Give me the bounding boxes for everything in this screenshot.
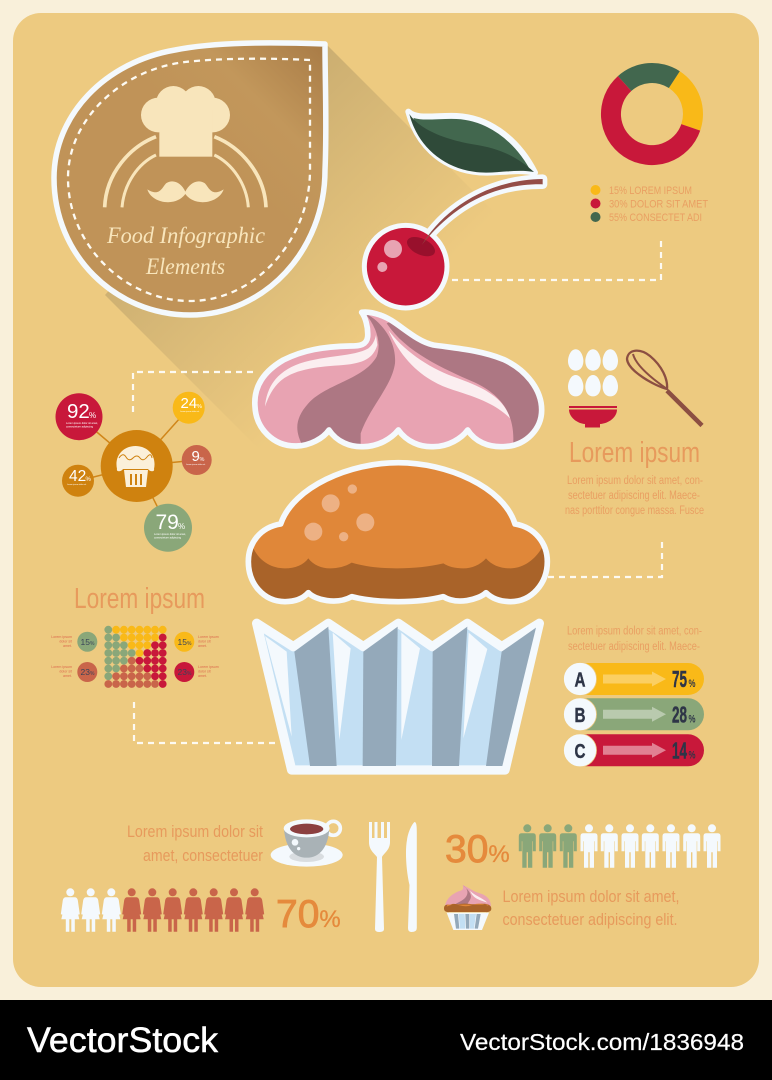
dot matrix legend: Lorem ipsum: [51, 665, 72, 669]
bubble 92: 92: [67, 400, 90, 423]
bar C: C: [574, 741, 586, 763]
text: cupcake caption: [502, 887, 680, 929]
icon: eggs: [568, 349, 618, 396]
bubble 9: [182, 445, 212, 475]
bubble 92: Lorem ipsum dolor sit amet,: [66, 421, 98, 425]
leaf: [408, 112, 535, 173]
text: coffee caption: amet, consectetuer: [143, 846, 263, 865]
footer url: VectorStock.com/1836948: [460, 1029, 744, 1055]
bubble 24: Lorem ipsum dolor sit: [180, 410, 200, 413]
bubble 42: [62, 465, 94, 497]
bubble 92: %: [89, 411, 96, 420]
icon: bowl: [569, 406, 617, 428]
bar C: %: [688, 749, 696, 761]
bar B: %: [688, 713, 696, 725]
bubble chart: [56, 392, 212, 552]
badge shape: [54, 43, 326, 315]
bubble 79: %: [178, 522, 185, 531]
donut legend: 30% DOLOR SIT AMET: [609, 198, 708, 210]
bubble 24: 24: [180, 395, 197, 412]
dot matrix legend: Lorem ipsum: [198, 665, 219, 669]
paragraph right: sectetuer adipiscing elit. Maece-: [568, 490, 700, 502]
paragraph right: [565, 475, 704, 517]
dot matrix legend: dolor sit: [198, 670, 211, 674]
dot matrix legend: amet.: [198, 644, 207, 648]
icon: fork: [369, 822, 390, 932]
bubble 79: Lorem ipsum dolor sit amet,: [154, 532, 186, 536]
bubble 24: [173, 392, 205, 424]
centre circle with muffin icon: [101, 430, 173, 502]
bubble 9: %: [200, 457, 204, 463]
text: cupcake caption: consectetuer adipiscing elit.: [502, 910, 678, 929]
stat 70%: 70%: [276, 893, 341, 936]
footer logo: VectorStock: [27, 1021, 219, 1060]
badge stitching: [68, 59, 310, 301]
donut legend: [590, 185, 708, 224]
footer bar: [0, 1000, 772, 1080]
muffin liner: [257, 623, 539, 770]
dot matrix legend: Lorem ipsum: [51, 635, 72, 639]
muffin top: [243, 460, 553, 607]
pictogram: 70% women: [61, 888, 264, 932]
icon: chef: [105, 86, 266, 207]
stem: [364, 179, 543, 308]
stat 30%: 30%: [445, 828, 510, 871]
dot matrix legend: amet.: [198, 674, 207, 678]
bubble 9: Lorem ipsum dolor sit: [186, 463, 206, 466]
paragraph right: nas porttitor congue massa. Fusce: [565, 505, 704, 517]
meringue: [250, 307, 550, 453]
cherry: [364, 112, 543, 308]
bar A: [564, 662, 704, 696]
bubble 92: [56, 393, 102, 440]
paragraph above bars: [567, 626, 702, 653]
heading right: Lorem ipsum: [569, 437, 700, 469]
bar B: B: [574, 705, 586, 727]
badge title: [106, 223, 265, 279]
icon: coffee cup: [271, 819, 343, 867]
bubble 79: consectetuer adipiscing: [154, 536, 182, 540]
bar A: A: [574, 670, 586, 692]
dot matrix legend: 15%: [178, 637, 192, 647]
donut legend: 15% LOREM IPSUM: [609, 185, 692, 197]
dot matrix legend: dolor sit: [59, 670, 72, 674]
badge title: Food Infographic: [106, 223, 265, 248]
paragraph above bars: sectetuer adipiscing elit. Maece-: [568, 641, 700, 653]
dot matrix legend: amet.: [63, 644, 72, 648]
bubble 9: 9: [192, 448, 200, 465]
bubble 42: 42: [69, 468, 86, 485]
bubble 79: [144, 504, 192, 552]
bar C: [564, 734, 704, 767]
dot matrix legend: Lorem ipsum: [198, 635, 219, 639]
bubble 24: %: [197, 404, 202, 410]
dot matrix legend: dolor sit: [59, 640, 72, 644]
connector lines: [133, 240, 662, 743]
donut chart: [601, 63, 703, 165]
dot matrix legend: [51, 632, 219, 682]
icon: knife: [406, 822, 417, 932]
bubble 79: 79: [156, 511, 179, 534]
paragraph right: Lorem ipsum dolor sit amet, con-: [567, 475, 703, 487]
dot matrix legend: 15%: [80, 637, 95, 647]
bubble 92: consectetuer adipiscing: [66, 424, 94, 428]
icon: whisk: [627, 351, 702, 426]
text: cupcake caption: Lorem ipsum dolor sit amet,: [502, 887, 680, 906]
dot matrix legend: dolor sit: [198, 640, 211, 644]
bar A: %: [688, 678, 696, 690]
bar B: [564, 698, 704, 731]
bar C: 14: [672, 737, 687, 763]
bar A: 75: [672, 666, 687, 692]
donut legend: 55% CONSECTET ADI: [609, 212, 702, 224]
icon: small cupcake: [444, 885, 491, 930]
badge: [54, 43, 326, 315]
dot matrix legend: 23%: [80, 667, 95, 677]
text: coffee caption: [127, 822, 263, 865]
long shadow: [105, 45, 560, 490]
pictogram: 30% men: [519, 824, 720, 868]
heading left: Lorem ipsum: [74, 583, 205, 615]
paragraph above bars: Lorem ipsum dolor sit amet, con-: [567, 626, 702, 638]
bar B: 28: [672, 701, 687, 727]
dot matrix legend: amet.: [63, 674, 72, 678]
bubble 42: %: [86, 477, 92, 483]
dot matrix chart: [104, 626, 167, 688]
dot matrix legend: 23%: [178, 667, 192, 677]
bubble 42: Lorem ipsum dolor sit: [67, 483, 87, 486]
badge title: Elements: [145, 254, 225, 279]
text: coffee caption: Lorem ipsum dolor sit: [127, 822, 263, 841]
